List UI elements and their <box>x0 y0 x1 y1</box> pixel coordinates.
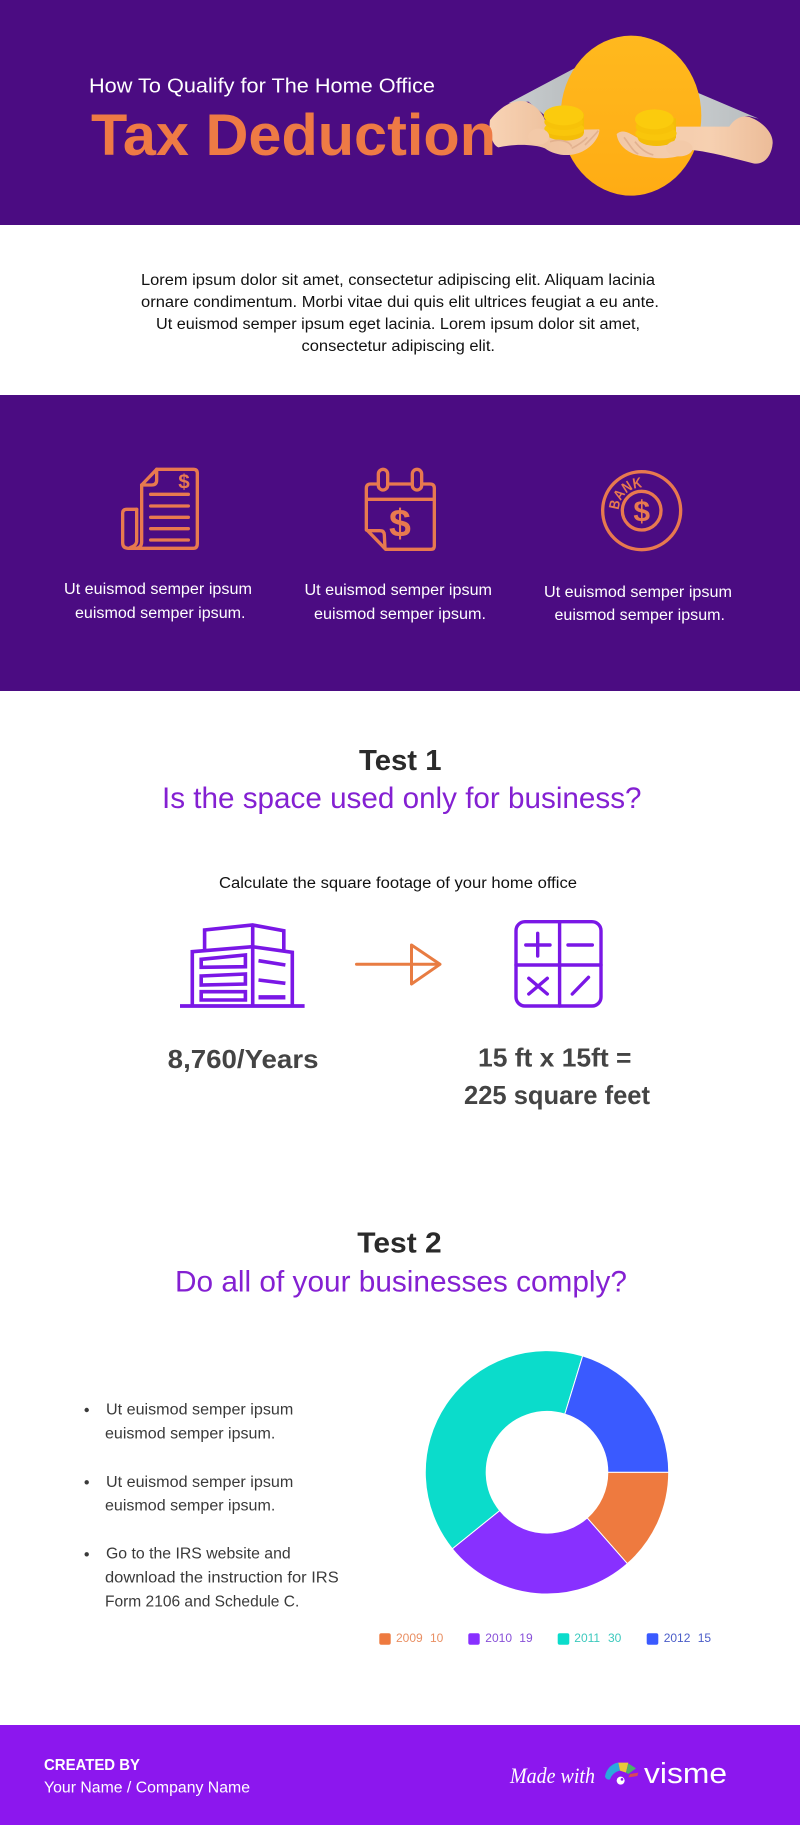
right sleeve <box>683 87 759 131</box>
text: feature 1: euismod semper ipsum. <box>75 605 246 622</box>
chart legend: 2011 <box>574 1631 600 1645</box>
left coin stack <box>544 105 584 141</box>
left sleeve <box>508 65 580 118</box>
made with visme logo: Made with <box>509 1763 595 1788</box>
icon: invoice document <box>123 469 197 548</box>
slice: 2012 <box>565 1356 669 1472</box>
heading: test 1 <box>162 745 642 815</box>
chart legend: 30 <box>608 1631 622 1645</box>
slice: 2010 <box>452 1510 627 1594</box>
panel: footer <box>0 1725 800 1825</box>
intro paragraph: ornare condimentum. Morbi vitae dui quis elit ultrices feugiat a eu ante. <box>141 294 659 311</box>
heading: test 2 <box>175 1228 627 1299</box>
chart legend: 15 <box>698 1631 711 1645</box>
right coin stack <box>635 109 677 146</box>
subtitle: How To Qualify for The Home Office <box>89 74 435 98</box>
illustration: hands holding coins <box>490 36 773 196</box>
credit <box>44 1757 250 1797</box>
text: feature 1: Ut euismod semper ipsum <box>64 581 252 598</box>
panel: three icon features <box>0 395 800 691</box>
credit: CREATED BY <box>44 1757 141 1774</box>
intro paragraph: Ut euismod semper ipsum eget lacinia. Lorem ipsum dolor sit amet, <box>156 316 640 333</box>
left arm and hand <box>490 101 599 155</box>
chart legend <box>379 1631 711 1645</box>
bullet list: download the instruction for IRS <box>105 1570 339 1586</box>
icon: office building <box>180 925 305 1006</box>
intro paragraph: consectetur adipiscing elit. <box>302 338 495 355</box>
bullet list: Go to the IRS website and <box>106 1546 291 1562</box>
text: feature 2 <box>304 582 492 623</box>
intro paragraph <box>141 272 659 355</box>
chart legend: 19 <box>519 1631 533 1645</box>
bullet list: euismod semper ipsum. <box>105 1498 275 1514</box>
heading: test 2: Do all of your businesses comply? <box>175 1266 627 1299</box>
heading: test 1: Test 1 <box>359 745 442 777</box>
bullet list: Form 2106 and Schedule C. <box>105 1594 299 1610</box>
stat: square footage <box>464 1043 650 1110</box>
chart legend: 2010 <box>485 1631 512 1645</box>
heading: test 1: Is the space used only for business? <box>162 782 642 815</box>
bullet list: Ut euismod semper ipsum <box>106 1474 293 1491</box>
stat: hours per year: 8,760/Years <box>168 1044 318 1074</box>
text: calculate caption: Calculate the square footage of your home office <box>219 875 577 892</box>
fingers <box>528 129 693 156</box>
chart legend: 10 <box>430 1631 444 1645</box>
icon: calendar with dollar: $ <box>389 501 411 545</box>
large gold coin <box>561 36 701 196</box>
intro paragraph: Lorem ipsum dolor sit amet, consectetur adipiscing elit. Aliquam lacinia <box>141 272 655 289</box>
chart legend: 2012 <box>664 1631 691 1645</box>
text: feature 2: Ut euismod semper ipsum <box>304 582 492 599</box>
slice: 2009 <box>587 1472 669 1564</box>
text: feature 3: Ut euismod semper ipsum <box>544 584 732 601</box>
text: feature 3: euismod semper ipsum. <box>554 607 725 624</box>
made with visme logo <box>509 1758 727 1790</box>
text: feature 2: euismod semper ipsum. <box>314 606 486 623</box>
text: feature 1 <box>64 581 252 622</box>
arrow <box>356 945 440 984</box>
stat: square footage: 225 square feet <box>464 1080 650 1110</box>
stat: square footage: 15 ft x 15ft = <box>478 1043 632 1073</box>
icon: bank coin <box>601 470 682 552</box>
made with visme logo: visme <box>644 1758 727 1790</box>
bullet list <box>84 1402 339 1610</box>
panel: header banner <box>0 0 800 225</box>
icon: bank coin: $ <box>633 496 650 529</box>
text: feature 3 <box>544 584 732 624</box>
right arm and hand <box>617 116 773 164</box>
slice: 2011 <box>425 1351 583 1549</box>
icon: calculator <box>516 922 601 1006</box>
credit: Your Name / Company Name <box>44 1780 250 1797</box>
icon: bank coin: BANK <box>608 477 642 510</box>
chart legend: 2009 <box>396 1631 423 1645</box>
title: Tax Deduction <box>91 103 496 168</box>
bullet list: Ut euismod semper ipsum <box>106 1402 293 1418</box>
icon: invoice document: $ <box>178 470 190 493</box>
donut chart <box>425 1351 669 1594</box>
icon: calendar with dollar <box>366 469 434 549</box>
bullet list: euismod semper ipsum. <box>105 1426 275 1442</box>
heading: test 2: Test 2 <box>357 1228 442 1260</box>
